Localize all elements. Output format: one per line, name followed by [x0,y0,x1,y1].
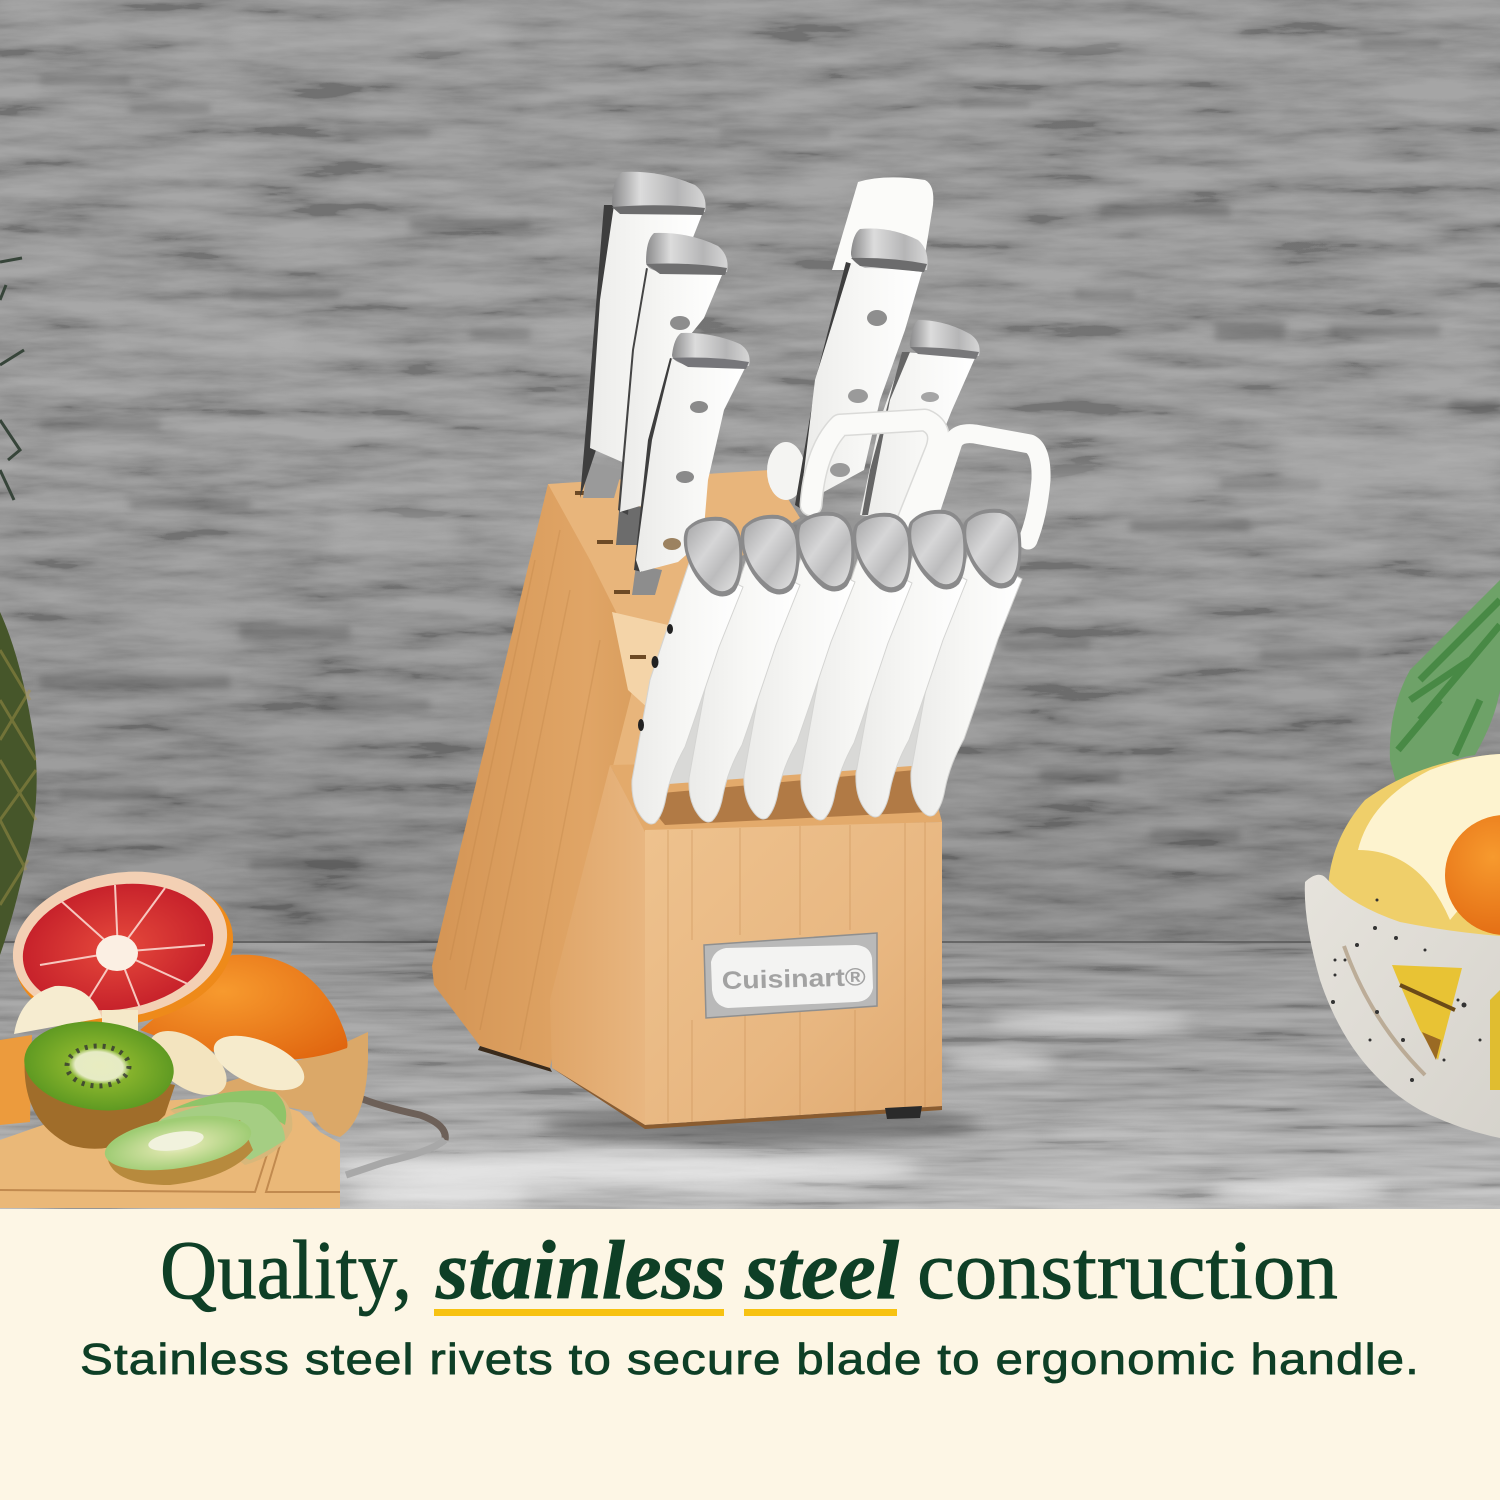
knife: chef handle 2 [616,233,728,545]
knife: chef handle 1 [580,172,706,498]
knife: back white handle and round handle [767,177,933,500]
concrete wall background [0,0,1500,950]
steak knives row [632,509,1022,824]
Cuisinart badge: Cuisinart® [721,963,867,995]
icon: green leaf [1390,580,1500,790]
knife: chef handle 4 [795,228,928,510]
headline: stainless [435,1224,726,1317]
headline [160,1224,1338,1317]
knife: back block slab [432,470,800,1072]
marble countertop [0,943,1500,1211]
Cuisinart badge [704,933,877,1018]
cutting board with handle [0,1032,445,1208]
knife block front [550,758,942,1129]
cream caption panel [0,1209,1500,1500]
icon: kiwi slices [101,1090,292,1185]
icon: blood orange half [1,855,245,1042]
icon: kiwi half [20,1014,178,1149]
yellow underlines [434,1309,897,1316]
subheading: Stainless steel rivets to secure blade to ergonomic handle. [80,1335,1420,1384]
kitchen tool: white shears handle [930,434,1041,540]
knife: chef handle 5 [860,320,980,520]
headline: Quality, [160,1224,412,1317]
icon: orange half [0,955,348,1125]
headline: construction [917,1224,1338,1317]
knife: chef handle 3 [632,333,750,595]
icon: fruit in bowl [1328,754,1500,980]
kitchen tool: white peeler loop [811,420,938,520]
icon: plant fronds and pineapple at left edge [0,258,37,955]
headline: steel [744,1224,900,1317]
icon: speckled ceramic bowl [1305,875,1500,1138]
icon: banana slices [14,986,312,1108]
